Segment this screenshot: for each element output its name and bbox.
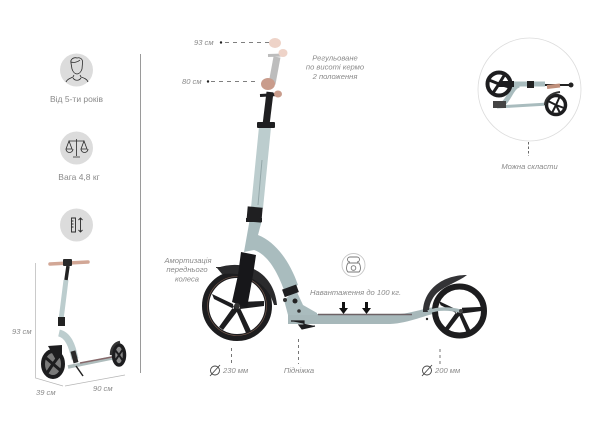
- folding joint: [284, 290, 317, 315]
- icon: diameter rear: [422, 365, 432, 376]
- rear wheel: [426, 286, 484, 336]
- text: length: 90 см: [93, 384, 113, 393]
- front mudguard: [217, 265, 277, 305]
- text: can be folded: Можна скласти: [501, 162, 558, 171]
- dimension lines: [36, 263, 125, 386]
- deck: [288, 306, 441, 324]
- text: width: 39 см: [36, 388, 56, 397]
- text: kickstand: Підніжка: [284, 366, 314, 375]
- pointer: front wheel: [230, 348, 232, 364]
- text: height: 93 см: [12, 327, 32, 336]
- text: adjustable handlebar: по висоті кермо: [306, 62, 364, 72]
- text: weight: Вага 4,8 кг: [58, 172, 100, 182]
- panel divider line: [140, 54, 142, 373]
- text: rear wheel diameter: 200 мм: [434, 366, 461, 375]
- pointer: kickstand: [298, 339, 300, 364]
- height label 93: 93 см: [194, 38, 214, 47]
- front fork and spring: [232, 252, 256, 308]
- text: suspension: колеса: [175, 274, 199, 284]
- folded frame: [504, 84, 545, 103]
- kickstand: [291, 321, 315, 329]
- folding clamp: [246, 206, 263, 223]
- folded rear wheel: [546, 96, 566, 114]
- suspension pointer: [216, 266, 221, 268]
- panel: folded scooter: [478, 38, 581, 141]
- small scooter: wheels: [43, 351, 63, 377]
- text: load: Навантаження до 100 кг.: [310, 288, 401, 297]
- icon: weight scales: [60, 132, 93, 164]
- text: adjustable handlebar: Регульоване: [312, 54, 358, 62]
- icon: diameter front: [210, 365, 220, 376]
- icon: child age: [60, 54, 93, 86]
- small scooter: stem and frame: [61, 280, 66, 320]
- text: suspension: переднього: [166, 265, 208, 274]
- main scooter: [206, 38, 484, 338]
- black upper stem: [266, 92, 270, 125]
- dashed line 93: [220, 41, 269, 44]
- pointer: folded: [528, 142, 530, 156]
- height label 80: 80 см: [182, 77, 202, 86]
- icon: kettlebell: [342, 254, 365, 276]
- rear mudguard: [423, 275, 467, 312]
- icon: dimensions: [60, 208, 93, 242]
- pointer: rear wheel: [439, 349, 441, 365]
- dashed line 80: [207, 80, 258, 83]
- load arrows: [339, 302, 371, 314]
- stem: [257, 127, 265, 208]
- small scooter: handlebar: [50, 262, 88, 264]
- folded front wheel: [488, 72, 510, 96]
- small scooter with dimensions: [36, 259, 125, 386]
- handlebar grip: [261, 78, 282, 98]
- text: adjustable handlebar: 2 положення: [312, 72, 357, 81]
- text: suspension: Амортизація: [163, 256, 212, 265]
- ghost raised handlebar: [268, 38, 288, 84]
- text: age: Від 5-ти років: [50, 94, 103, 104]
- front wheel: [206, 274, 268, 338]
- text: front wheel diameter: 230 мм: [222, 366, 249, 375]
- frame arch: [244, 218, 298, 290]
